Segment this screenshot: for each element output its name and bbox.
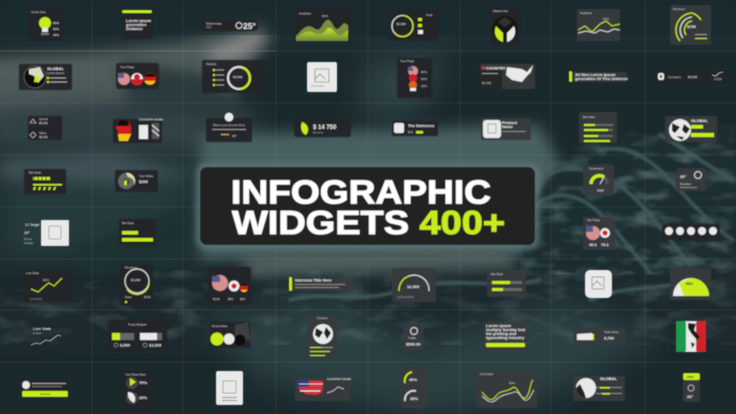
widget: two icon stats: 32,111 [39, 135, 48, 139]
widget: semicircle gauge: 12,300 [407, 284, 420, 289]
widget: gauge [583, 165, 614, 195]
widget: weather pill: Wednesday [206, 22, 222, 26]
widget: two pie percents: Your Data Stats [125, 372, 146, 376]
widget: three round flags: Your Flags [120, 65, 135, 69]
widget: globe stats [19, 64, 72, 90]
widget: lime accent text pill [569, 71, 629, 82]
widget: weather with image card: 20° [24, 230, 30, 235]
widget: product card: Name [502, 124, 514, 129]
widget: text with lime button: Lorem ipsum [486, 323, 512, 328]
widget: quote card with avatar: 4.7 [232, 134, 237, 138]
widget: radial chart: $200 [139, 179, 149, 184]
widget: five circle dots [662, 224, 720, 240]
widget: weather 20: 20° [680, 174, 686, 179]
widget: two pie percents: 26% [139, 395, 147, 400]
widget: globe panel [307, 315, 337, 358]
widget: line chart lime: 50% [43, 278, 49, 282]
widget: ring with stats [389, 10, 438, 40]
widget: Germany map card [113, 118, 163, 143]
widget: USA flag map with chart: COUNTRY NAME [327, 377, 351, 381]
widget: two pie percents [122, 372, 153, 409]
widget: stats strip: 2,100 [714, 77, 722, 81]
widget: gauge battery with stats: Total Value [604, 330, 619, 334]
widget: stacked flags list: 50% [421, 77, 427, 81]
widget: lime progress card: Continue [40, 392, 51, 396]
widget: lime accent text pill: All files Lorem Ipsum [575, 72, 616, 77]
widget: Germany map card: COUNTRY NAME [139, 118, 163, 122]
widget: weather pill: 2021 [206, 26, 212, 29]
widget: globe with lime bars [665, 116, 717, 142]
widget: flags with percentages [583, 217, 615, 250]
widget: leaf value: Business [313, 132, 324, 134]
widget: globe with bars: GLOBAL [600, 376, 617, 381]
widget: stats strip [656, 71, 726, 82]
widget: text with lime button: multiply Sunday test [486, 327, 526, 332]
widget: weather 20 [676, 168, 706, 191]
heading: widgets 400+: WIDGETS 400+ [232, 204, 505, 241]
widget: light bulb: 60% [53, 27, 59, 31]
widget: bar list: Bar Data [583, 115, 595, 119]
widget: lime progress card [22, 379, 68, 397]
widget: text card with lime bar: Lorem ipsum [126, 18, 152, 23]
widget: double line chart: 50% [603, 17, 609, 21]
widget: small weather tag: +30% [686, 375, 694, 379]
widget: quote card with avatar: What is your favourite thing [213, 123, 245, 127]
widget: text with lime button [484, 322, 528, 352]
widget: ring with stats: Total [426, 13, 433, 17]
widget: concentric arcs [670, 5, 711, 45]
widget: ring with stats: $1,000 [396, 22, 406, 26]
widget: gauge: 5000 [597, 188, 604, 192]
widget: globe with bars [573, 376, 625, 401]
widget: three ball stats: Donut Data [212, 324, 228, 328]
widget: gauge battery with stats: 9,700 [604, 336, 615, 340]
widget: price icon [404, 324, 424, 350]
widget: flags row: $100 [213, 297, 220, 301]
widget: area chart: Analytics [299, 12, 312, 16]
widget: double line chart [577, 9, 620, 41]
widget: quote card with avatar [206, 112, 252, 142]
widget: battery pair: 6,000 [120, 342, 131, 348]
widget: USA map stats [480, 64, 535, 89]
widget: weather with image card: Details [24, 241, 34, 245]
widget: double line chart: Analytics [580, 11, 593, 15]
widget: wavy line chart: 50% [509, 381, 515, 385]
widget: flags row: $60 [240, 297, 245, 301]
title panel [196, 163, 540, 249]
widget: half dome: 50% [686, 282, 694, 286]
widget: light bulb [28, 9, 62, 41]
widget: lime accent banner [289, 277, 354, 291]
widget: sparkline [31, 326, 61, 345]
widget: wavy line chart: Line Data [480, 372, 493, 376]
widget: rating bars [24, 169, 66, 194]
widget: stacked flags list [397, 58, 432, 98]
widget: three ball stats [210, 322, 250, 348]
widget: weather 20: Weather [680, 182, 691, 186]
widget: stacked flags list: 80% [421, 70, 427, 74]
widget: Italy flag map [676, 321, 706, 352]
widget: two icon stats: Speed [39, 117, 48, 121]
widget: light bulb: 40% [53, 33, 59, 37]
widget: half dome [670, 268, 711, 300]
widget: ring stats: Data [125, 295, 132, 299]
widget: radial chart [115, 170, 158, 192]
widget: leaf value: $ 14 750 [313, 125, 337, 131]
widget: battery pair [108, 320, 167, 350]
widget: the darkness: The Darkness [408, 123, 435, 128]
widget: bars small [487, 270, 526, 297]
widget: the darkness [392, 121, 438, 136]
widget: USA flag map with chart [295, 377, 351, 401]
widget: globe stats: GLOBAL [47, 66, 64, 71]
widget: semicircle gauge: 10 20 30 40 50 [397, 296, 414, 299]
widget: price icon: Traffic [408, 336, 417, 340]
widget: arc percents: 35% [410, 396, 418, 401]
widget: globe stats: Lorem ipsum [47, 71, 65, 75]
widget: battery pair: Trusty Widgets [128, 322, 147, 326]
widget: white placeholder card [307, 62, 337, 92]
widget: text with lime button: typesetting industry [486, 335, 525, 340]
widget: stats strip: $1,000 [688, 75, 698, 79]
widget: bar list [579, 112, 617, 143]
widget: sparkline: Line Data [33, 326, 52, 331]
widget: donut with list: Statistic [206, 62, 217, 66]
widget: two icon stats: Value [39, 131, 47, 135]
widget: donut with list: 53,000 [233, 75, 243, 79]
widget: text card with lime bar: Distance [126, 26, 143, 31]
widget: stacked flags list: 30% [421, 84, 427, 88]
widget: donut with list [202, 60, 264, 93]
widget: flags row: $80 [228, 297, 233, 301]
widget: line chart lime [23, 270, 70, 302]
widget: arc percents [401, 367, 427, 408]
widget: ring stats: $200 [144, 295, 151, 299]
heading: infographic: INFOGRAPHIC [231, 174, 491, 210]
widget: rating bars: Bar Data [29, 170, 41, 174]
widget: lime accent text pill: generation Of This Universe [575, 76, 629, 81]
widget: weather with image card: Rome [24, 237, 32, 241]
widget: line chart lime: Line Data [26, 271, 39, 275]
widget: text card with lime bar [122, 10, 152, 39]
widget: lime accent banner: Interview Title Here [295, 278, 332, 282]
widget: battery pair: 12,100 [149, 342, 162, 348]
widget: price icon: $500.00 [406, 342, 421, 346]
widget: leaf value [294, 119, 351, 137]
widget: sparkline: Lorem [33, 331, 42, 335]
widget: cube pie: Market Info [493, 9, 508, 13]
widget: semicircle gauge [392, 268, 436, 302]
widget: two lime bars [119, 219, 156, 245]
widget: two lime bars: Bar Data [122, 221, 134, 225]
widget: line chart lime: 1 2 3 4 5 6 [30, 298, 42, 301]
widget: bars small: Bar Data [491, 272, 503, 276]
widget: ring stats: $1,000 [131, 278, 141, 282]
widget: white placeholder card: Placeholder [311, 84, 325, 88]
widget: light bulb: 80% [53, 21, 59, 25]
widget: two icon stats: 25,111 [39, 121, 48, 125]
widget: flags with percentages: Top Flags [587, 218, 601, 222]
widget: area chart: 50% [322, 14, 328, 18]
widget: wavy line chart [476, 370, 537, 408]
widget: concentric arcs: Revenue [673, 7, 685, 11]
widget: flags row [208, 267, 251, 305]
widget: product card: Product [502, 120, 518, 125]
widget: stats strip: Company [668, 75, 681, 79]
widget: flags with percentages: 70.1 [601, 242, 610, 247]
widget: weather pill [202, 20, 258, 31]
widget: text card with lime bar: generation [126, 22, 147, 27]
widget: small weather tag [683, 373, 700, 402]
widget: text with lime button: the printing and [486, 331, 517, 336]
widget: small weather tag: 26° [687, 394, 693, 399]
widget: ring stats: Revenue [125, 266, 137, 270]
widget: concentric arcs: $700 [687, 24, 697, 29]
widget: white image icon [585, 270, 612, 298]
widget: weather pill: 25° [243, 21, 256, 31]
widget: radial chart: Your Value [139, 174, 154, 178]
widget: stacked flags list: Your Flags [400, 59, 415, 63]
widget: two pie percents: 70% [139, 380, 147, 385]
widget: light bulb: Smart Idea [31, 10, 46, 14]
widget: cube pie [490, 8, 520, 45]
widget: weather with image card: 17 Sept [25, 222, 40, 227]
widget: USA map stats: $1,000 [482, 81, 492, 85]
widget: white tall card [216, 371, 243, 405]
widget: arc percents: 40% [409, 377, 417, 382]
widget: weather with image card [24, 220, 69, 246]
widget: USA map stats: COUNTRY [486, 66, 506, 70]
widget: product card [481, 118, 531, 140]
widget: three round flags [116, 63, 159, 89]
widget: two icon stats [28, 116, 62, 140]
widget: gauge: Temperature [589, 166, 604, 170]
widget: flags with percentages: 40.1 [589, 242, 598, 247]
widget: gauge battery with stats [573, 328, 625, 345]
widget: the darkness: $12 [408, 130, 413, 134]
widget: globe with lime bars: GLOBAL [691, 118, 708, 123]
widget: globe panel: Country [317, 316, 328, 320]
widget: area chart [295, 9, 350, 42]
widget: ring stats [120, 265, 153, 306]
